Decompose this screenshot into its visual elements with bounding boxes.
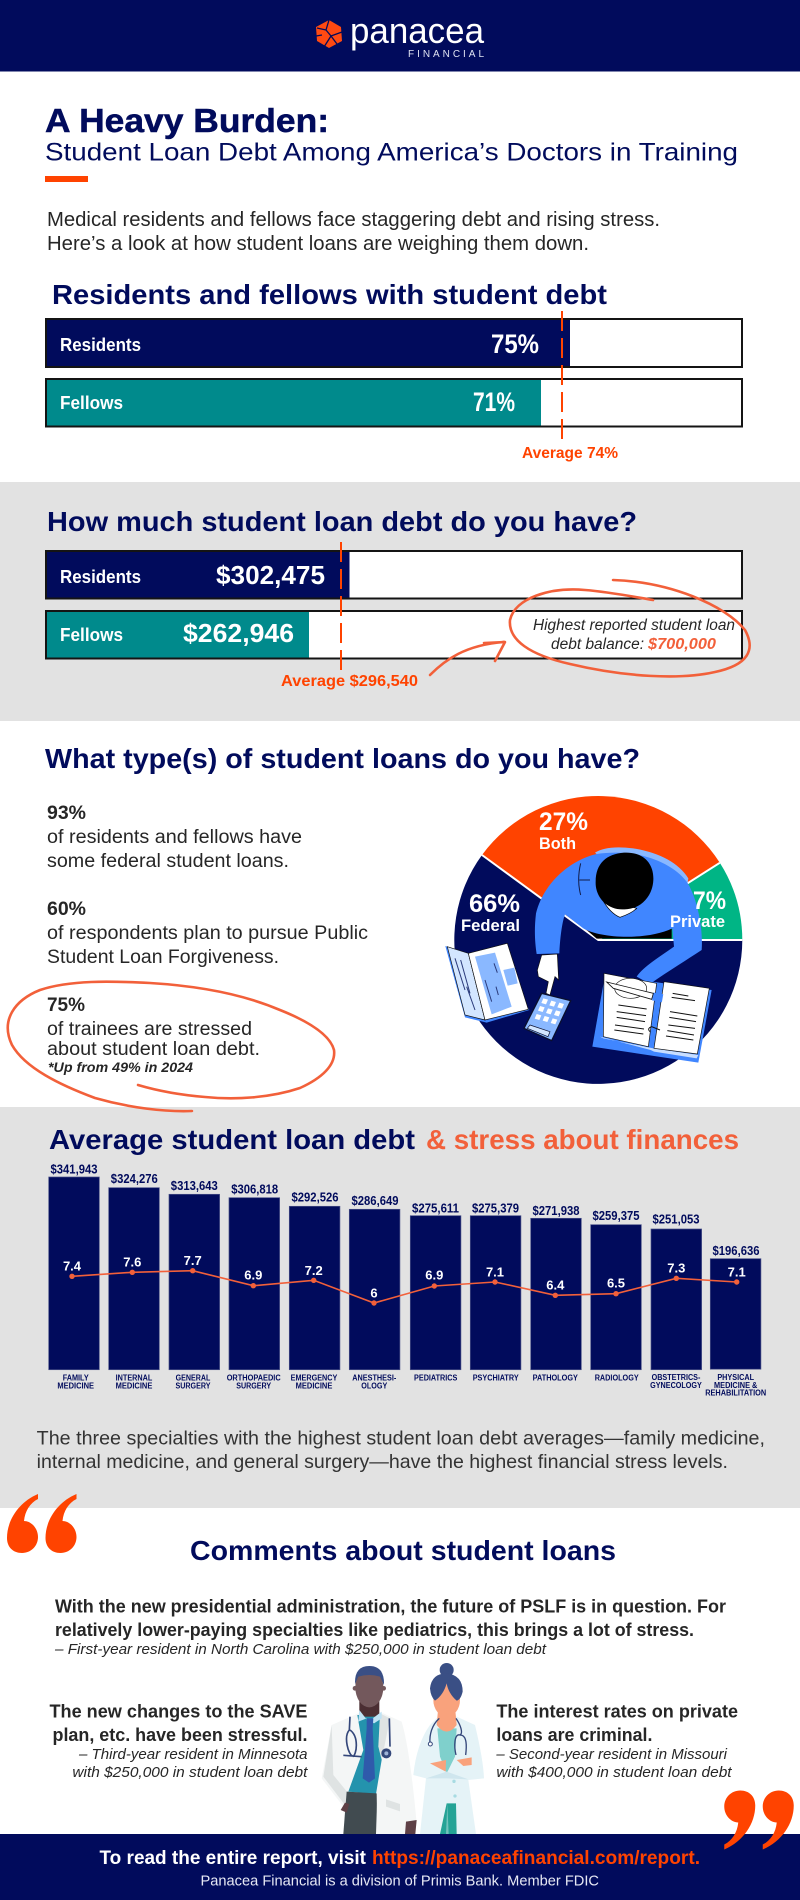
- specialty labels: PEDIATRICS: [414, 1373, 458, 1383]
- heading: [49, 1124, 739, 1155]
- specialty labels: PSYCHIATRY: [473, 1373, 519, 1383]
- specialty labels: EMERGENCY: [291, 1373, 338, 1383]
- call to action: https://panaceafinancial.com/report.: [372, 1847, 700, 1869]
- stat: 93%: 93%: [47, 803, 86, 824]
- stat: 60%: of respondents plan to pursue Public: [47, 923, 368, 944]
- stat: 60%: 60%: [47, 899, 86, 920]
- specialty labels: MEDICINE &: [714, 1380, 757, 1390]
- label: 27% both: Both: [539, 834, 576, 853]
- heading: & stress about finances: [426, 1124, 739, 1155]
- label: 66% federal: 66%: [469, 890, 520, 918]
- specialty labels: SURGERY: [236, 1381, 271, 1391]
- stress values: 7.1: [486, 1265, 504, 1280]
- heading: What type(s) of student loans do you have?: [45, 743, 640, 774]
- call to action: To read the entire report, visit: [100, 1847, 366, 1869]
- intro text: Medical residents and fellows face staggering debt and rising stress.: [47, 208, 660, 231]
- logo wordmark: panacea: [350, 10, 485, 51]
- specialty labels: RADIOLOGY: [595, 1373, 639, 1383]
- quote: PSLF: With the new presidential administration, the future of PSLF is in question. For: [55, 1596, 726, 1617]
- chart takeaway: [37, 1427, 765, 1473]
- panel: types of student loans: [45, 743, 742, 1084]
- intro text: [47, 208, 660, 255]
- specialty labels: PHYSICAL: [717, 1372, 754, 1382]
- label: 66% federal: [461, 890, 520, 935]
- pointing hand: [537, 954, 559, 995]
- specialty labels: FAMILY: [63, 1373, 89, 1383]
- header band with logo: [0, 0, 800, 72]
- quote: SAVE plan: with $250,000 in student loan debt: [72, 1764, 308, 1781]
- title accent bar: [45, 176, 88, 182]
- debt values: $196,636: [712, 1244, 760, 1258]
- stat: 93%: of residents and fellows have: [47, 827, 302, 848]
- stat: 75%: about student loan debt.: [47, 1039, 260, 1060]
- debt values: $306,818: [231, 1182, 278, 1196]
- bar: fellows 71%: Fellows: [60, 393, 123, 413]
- callout: highest balance: [510, 580, 750, 676]
- stat: 60%: Student Loan Forgiveness.: [47, 947, 279, 968]
- stress values: 6.9: [425, 1268, 443, 1283]
- chart takeaway: The three specialties with the highest student loan debt averages—family medicine,: [37, 1427, 765, 1449]
- stress values: 6.5: [607, 1275, 625, 1290]
- head: [596, 853, 653, 917]
- quote: private rates: [495, 1701, 738, 1781]
- quote: private rates: The interest rates on private: [496, 1701, 738, 1722]
- seat: [587, 918, 672, 939]
- specialty labels: REHABILITATION: [705, 1388, 766, 1398]
- specialty labels: OBSTETRICS-: [652, 1372, 700, 1382]
- specialty labels: [57, 1372, 766, 1398]
- stat: 93%: [47, 803, 302, 872]
- stress values: 6.9: [244, 1268, 262, 1283]
- bar: fellows $262,946: $262,946: [183, 618, 294, 648]
- illustration: two doctors: [322, 1663, 484, 1834]
- bar: residents $302,475: [46, 551, 742, 598]
- quote: SAVE plan: [50, 1701, 308, 1781]
- stress values: 7.7: [184, 1253, 202, 1268]
- specialty labels: MEDICINE: [57, 1381, 94, 1391]
- quote: PSLF: [54, 1596, 726, 1658]
- bars: [49, 1177, 761, 1370]
- bar: fellows 71%: [46, 379, 742, 426]
- male doctor: [322, 1666, 417, 1834]
- specialty labels: GYNECOLOGY: [650, 1380, 702, 1390]
- stress values: 6: [370, 1286, 378, 1301]
- specialty labels: INTERNAL: [116, 1373, 152, 1383]
- heading: Residents and fellows with student debt: [52, 279, 607, 310]
- stat: 60%: [47, 899, 368, 968]
- heading: Average student loan debt: [49, 1124, 415, 1155]
- average marker $296,540: Average $296,540: [281, 673, 418, 690]
- writing hand and pen: [607, 978, 653, 999]
- call to action: [100, 1847, 700, 1869]
- label: 27% both: [539, 808, 588, 853]
- stress values: 7.6: [123, 1255, 141, 1270]
- bar: residents 75%: 75%: [491, 329, 539, 359]
- stress values: 6.4: [546, 1277, 565, 1292]
- callout: highest balance: $700,000: [647, 636, 716, 653]
- scribble circle around 75% stat: [8, 982, 334, 1111]
- shoulder highlight: [595, 847, 688, 888]
- specialty labels: ANESTHESI-: [352, 1373, 396, 1383]
- stress values: 7.2: [305, 1263, 323, 1278]
- debt values: $251,053: [652, 1212, 700, 1226]
- debt values: $313,643: [171, 1179, 218, 1193]
- callout: highest balance: Highest reported student loan: [533, 617, 735, 634]
- quote: SAVE plan: – Third-year resident in Minnesota: [78, 1746, 307, 1763]
- female doctor: [413, 1663, 484, 1834]
- bar: residents 75%: Residents: [60, 335, 141, 355]
- title: [45, 102, 738, 166]
- callout: highest balance: debt balance:: [551, 636, 644, 653]
- quote: SAVE plan: The new changes to the SAVE: [50, 1701, 308, 1722]
- quote: private rates: – Second-year resident in Missouri: [495, 1746, 728, 1763]
- panel: residents and fellows with student debt: [46, 279, 742, 462]
- stat: 75%: of trainees are stressed: [47, 1019, 252, 1040]
- bar: fellows $262,946: [46, 611, 742, 658]
- debt values: $286,649: [352, 1194, 399, 1208]
- specialty labels: GENERAL: [176, 1373, 210, 1383]
- stress line: [69, 1268, 739, 1306]
- body and arms: [535, 853, 702, 984]
- bar chart: [49, 1162, 766, 1398]
- bar: residents $302,475: $302,475: [216, 560, 325, 590]
- stress values: 7.4: [63, 1259, 82, 1274]
- disclosure: Panacea Financial is a division of Primis Bank. Member FDIC: [200, 1874, 599, 1890]
- illustration: person at desk: [445, 847, 712, 1063]
- specialty labels: MEDICINE: [116, 1381, 153, 1391]
- specialty labels: ORTHOPAEDIC: [227, 1373, 281, 1383]
- specialty labels: MEDICINE: [296, 1381, 333, 1391]
- specialty labels: OLOGY: [361, 1381, 388, 1391]
- heading: Comments about student loans: [190, 1535, 616, 1566]
- pie chart with illustration: [445, 796, 742, 1084]
- debt values: $324,276: [111, 1172, 158, 1186]
- panel: average debt and stress chart: [0, 1107, 800, 1508]
- calculator: [524, 993, 571, 1041]
- stress values: 7.3: [667, 1261, 685, 1276]
- quote: PSLF: – First-year resident in North Carolina with $250,000 in student loan debt: [54, 1641, 547, 1658]
- icon: panacea logo mark: [316, 20, 342, 48]
- intro text: Here’s a look at how student loans are weighing them down.: [47, 232, 589, 255]
- label: 7% private: 7%: [693, 887, 726, 915]
- debt values: [50, 1162, 760, 1258]
- bar: residents 75%: [46, 319, 742, 367]
- stat: 75%: 75%: [47, 995, 85, 1016]
- chart takeaway: internal medicine, and general surgery—have the highest financial stress levels.: [37, 1451, 728, 1473]
- logo wordmark: FINANCIAL: [408, 49, 484, 60]
- stat: 93%: some federal student loans.: [47, 851, 289, 872]
- footer band: [0, 1834, 800, 1900]
- label: 7% private: Private: [670, 912, 725, 931]
- heading: How much student loan debt do you have?: [47, 506, 637, 537]
- debt values: $275,379: [472, 1201, 519, 1215]
- bar: fellows 71%: 71%: [473, 387, 515, 417]
- debt values: $341,943: [50, 1162, 98, 1176]
- bar: residents $302,475: Residents: [60, 567, 141, 587]
- stat: 75%: *Up from 49% in 2024: [48, 1060, 194, 1075]
- specialty labels: SURGERY: [176, 1381, 211, 1391]
- label: 27% both: 27%: [539, 808, 588, 836]
- arrow to callout: [430, 642, 505, 675]
- stress values: 7.1: [728, 1265, 746, 1280]
- bar: fellows $262,946: Fellows: [60, 625, 123, 645]
- notebook: [592, 973, 712, 1063]
- label: 66% federal: Federal: [461, 916, 520, 935]
- label: 7% private: [670, 887, 726, 931]
- average marker 74%: Average 74%: [522, 445, 618, 462]
- quote: PSLF: relatively lower-paying specialties like pediatrics, this brings a lot of stress.: [55, 1619, 694, 1640]
- panel: how much student loan debt: [0, 482, 800, 721]
- debt values: $292,526: [292, 1190, 339, 1204]
- pie slices: [454, 796, 742, 1084]
- quote: private rates: with $400,000 in student loan debt: [496, 1764, 732, 1781]
- quote: SAVE plan: plan, etc. have been stressful.: [52, 1724, 308, 1745]
- stress values: [63, 1253, 746, 1301]
- icon: opening quotation mark: [7, 1494, 76, 1553]
- debt values: $271,938: [532, 1204, 580, 1218]
- debt values: $275,611: [412, 1201, 459, 1215]
- quote: private rates: loans are criminal.: [496, 1724, 652, 1745]
- debt values: $259,375: [592, 1209, 640, 1223]
- panel: comments about student loans: [50, 1535, 738, 1834]
- title: Student Loan Debt Among America’s Doctors in Training: [45, 138, 738, 166]
- laptop: [445, 943, 529, 1023]
- title: A Heavy Burden:: [45, 102, 329, 139]
- icon: closing quotation mark: [724, 1790, 794, 1850]
- specialty labels: PATHOLOGY: [533, 1373, 578, 1383]
- stat: 75%: [47, 995, 260, 1075]
